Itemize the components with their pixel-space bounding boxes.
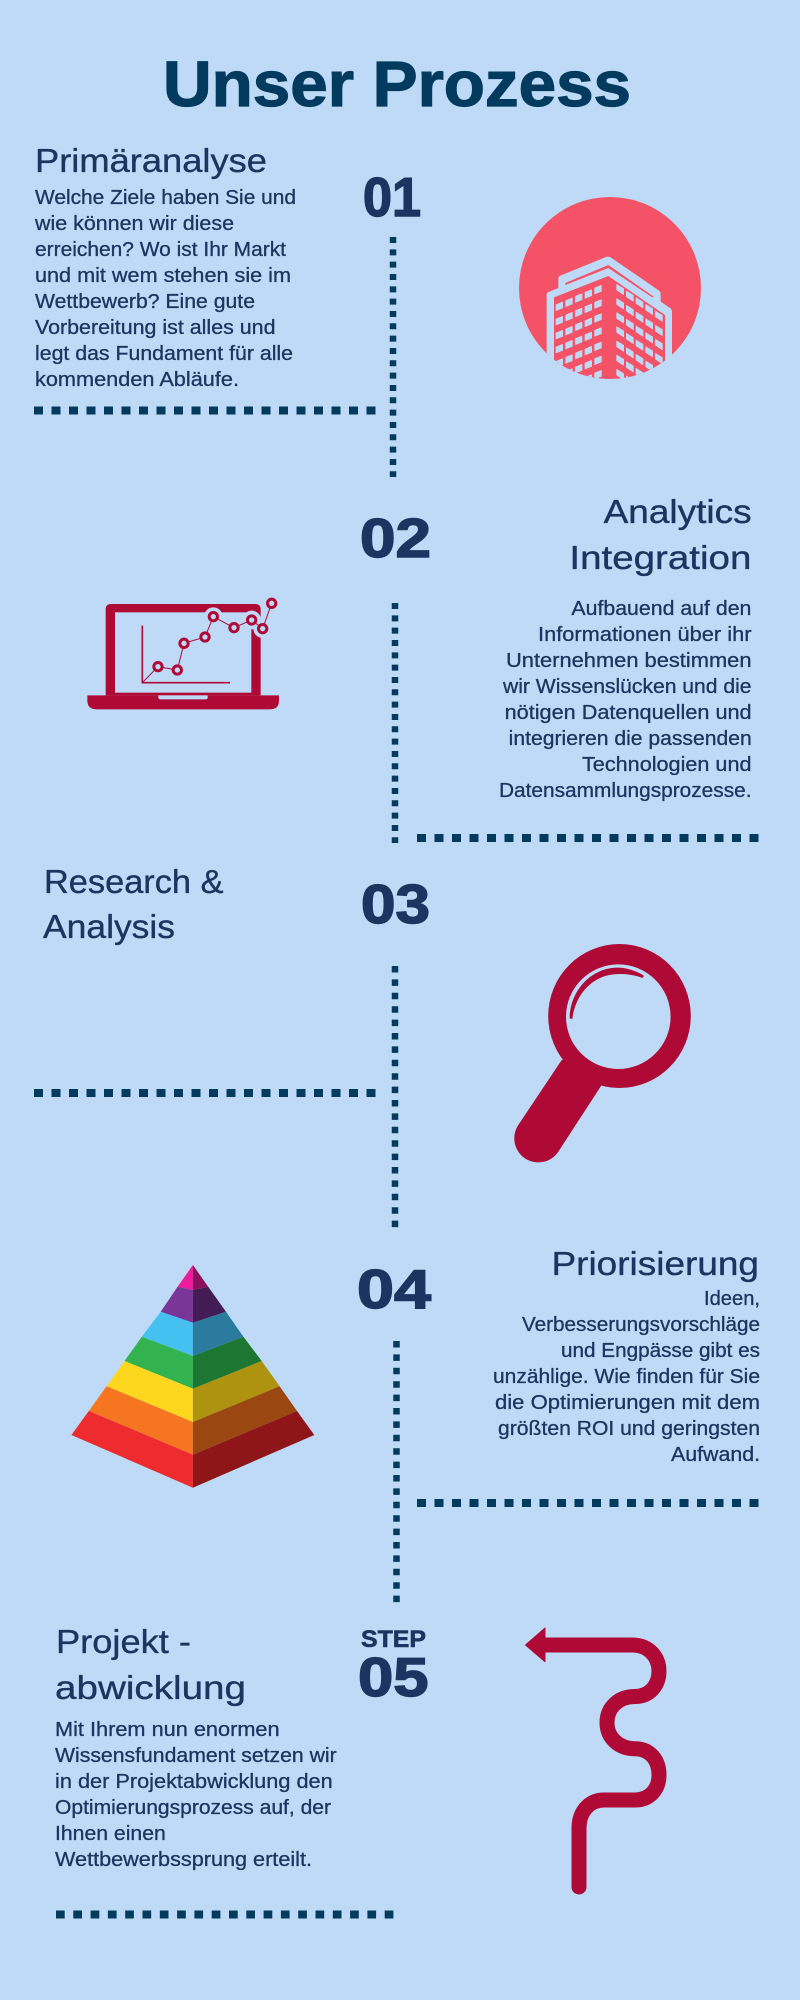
- text block: step 5 description: Ihnen einen: [55, 1823, 166, 1845]
- icon: laptop with line chart: [87, 599, 279, 709]
- icon: winding arrow: [526, 1628, 659, 1887]
- text block: step 5 description: Wettbewerbssprung erteilt.: [55, 1849, 312, 1871]
- number 01: 01: [363, 166, 421, 228]
- heading: Analytics Integration: Analytics: [604, 493, 752, 530]
- text block: step 1 description: legt das Fundament für alle: [35, 343, 293, 365]
- text block: step 2 description: Aufbauend auf den: [571, 598, 751, 620]
- text block: step 2 description: Informationen über ihr: [538, 624, 752, 646]
- text block: step 2 description: Unternehmen bestimmen: [506, 650, 752, 672]
- text block: step 1 description: Wettbewerb? Eine gute: [35, 291, 255, 313]
- heading: Research & Analysis: Research &: [44, 863, 223, 900]
- text block: step 4 description: die Optimierungen mit dem: [495, 1392, 760, 1414]
- text block: step 4 description: unzählige. Wie finden für Sie: [493, 1366, 760, 1388]
- heading: Research & Analysis: [43, 863, 223, 945]
- text block: step 5 description: Wissensfundament setzen wir: [55, 1745, 337, 1767]
- panel: step 4 Priorisierung: [71, 1245, 760, 1603]
- text block: step 1 description: und mit wem stehen sie im: [35, 265, 291, 287]
- text block: step 5 description: [55, 1719, 337, 1871]
- heading: Priorisierung: Priorisierung: [552, 1245, 759, 1282]
- icon: rainbow pyramid: [71, 1265, 314, 1488]
- heading: Projekt - abwicklung: abwicklung: [55, 1669, 246, 1706]
- text block: step 1 description: erreichen? Wo ist Ihr Markt: [35, 239, 286, 261]
- heading: Primäranalyse: Primäranalyse: [35, 142, 267, 179]
- text block: step 1 description: Welche Ziele haben Sie und: [35, 187, 296, 209]
- panel: step 1 Primäranalyse: [34, 142, 701, 477]
- label: STEP: STEP: [361, 1626, 426, 1653]
- text block: step 2 description: wir Wissenslücken und die: [502, 676, 752, 698]
- number 04: 04: [357, 1258, 431, 1320]
- text block: step 1 description: [34, 187, 296, 391]
- heading: Analytics Integration: [569, 493, 752, 576]
- text block: step 4 description: und Engpässe gibt es: [561, 1340, 760, 1362]
- text block: step 5 description: Mit Ihrem nun enormen: [55, 1719, 280, 1741]
- panel: step 3 Research & Analysis: [34, 863, 691, 1228]
- text block: step 2 description: nötigen Datenquellen und: [505, 702, 752, 724]
- heading: Projekt - abwicklung: [55, 1623, 246, 1706]
- text block: step 4 description: größten ROI und geringsten: [498, 1418, 760, 1440]
- title: Unser Prozess: [163, 48, 631, 120]
- panel: step 2 Analytics Integration: [87, 493, 760, 843]
- text block: step 4 description: Verbesserungsvorschläge: [522, 1314, 760, 1336]
- heading: Research & Analysis: Analysis: [43, 908, 175, 945]
- text block: step 1 description: wie können wir diese: [34, 213, 234, 235]
- icon: office building in circle: [519, 197, 701, 379]
- heading: Analytics Integration: Integration: [569, 539, 751, 576]
- text block: step 1 description: Vorbereitung ist alles und: [35, 317, 276, 339]
- panel: step 5 Projektabwicklung: [55, 1623, 659, 1914]
- text block: step 2 description: integrieren die passenden: [509, 728, 752, 750]
- icon: magnifying glass: [514, 944, 691, 1162]
- text block: step 2 description: Datensammlungsprozesse.: [499, 780, 752, 802]
- number 05: 05: [358, 1646, 429, 1708]
- text block: step 4 description: Aufwand.: [671, 1444, 760, 1466]
- text block: step 1 description: kommenden Abläufe.: [35, 369, 239, 391]
- text block: step 2 description: Technologien und: [582, 754, 752, 776]
- text block: step 5 description: in der Projektabwicklung den: [55, 1771, 333, 1793]
- text block: step 4 description: [493, 1288, 760, 1466]
- text block: step 5 description: Optimierungsprozess auf, der: [55, 1797, 331, 1819]
- number 02: 02: [360, 507, 431, 569]
- heading: Projekt - abwicklung: Projekt -: [56, 1623, 191, 1660]
- text block: step 2 description: [499, 598, 752, 802]
- text block: step 4 description: Ideen,: [704, 1288, 760, 1310]
- number 03: 03: [361, 873, 430, 935]
